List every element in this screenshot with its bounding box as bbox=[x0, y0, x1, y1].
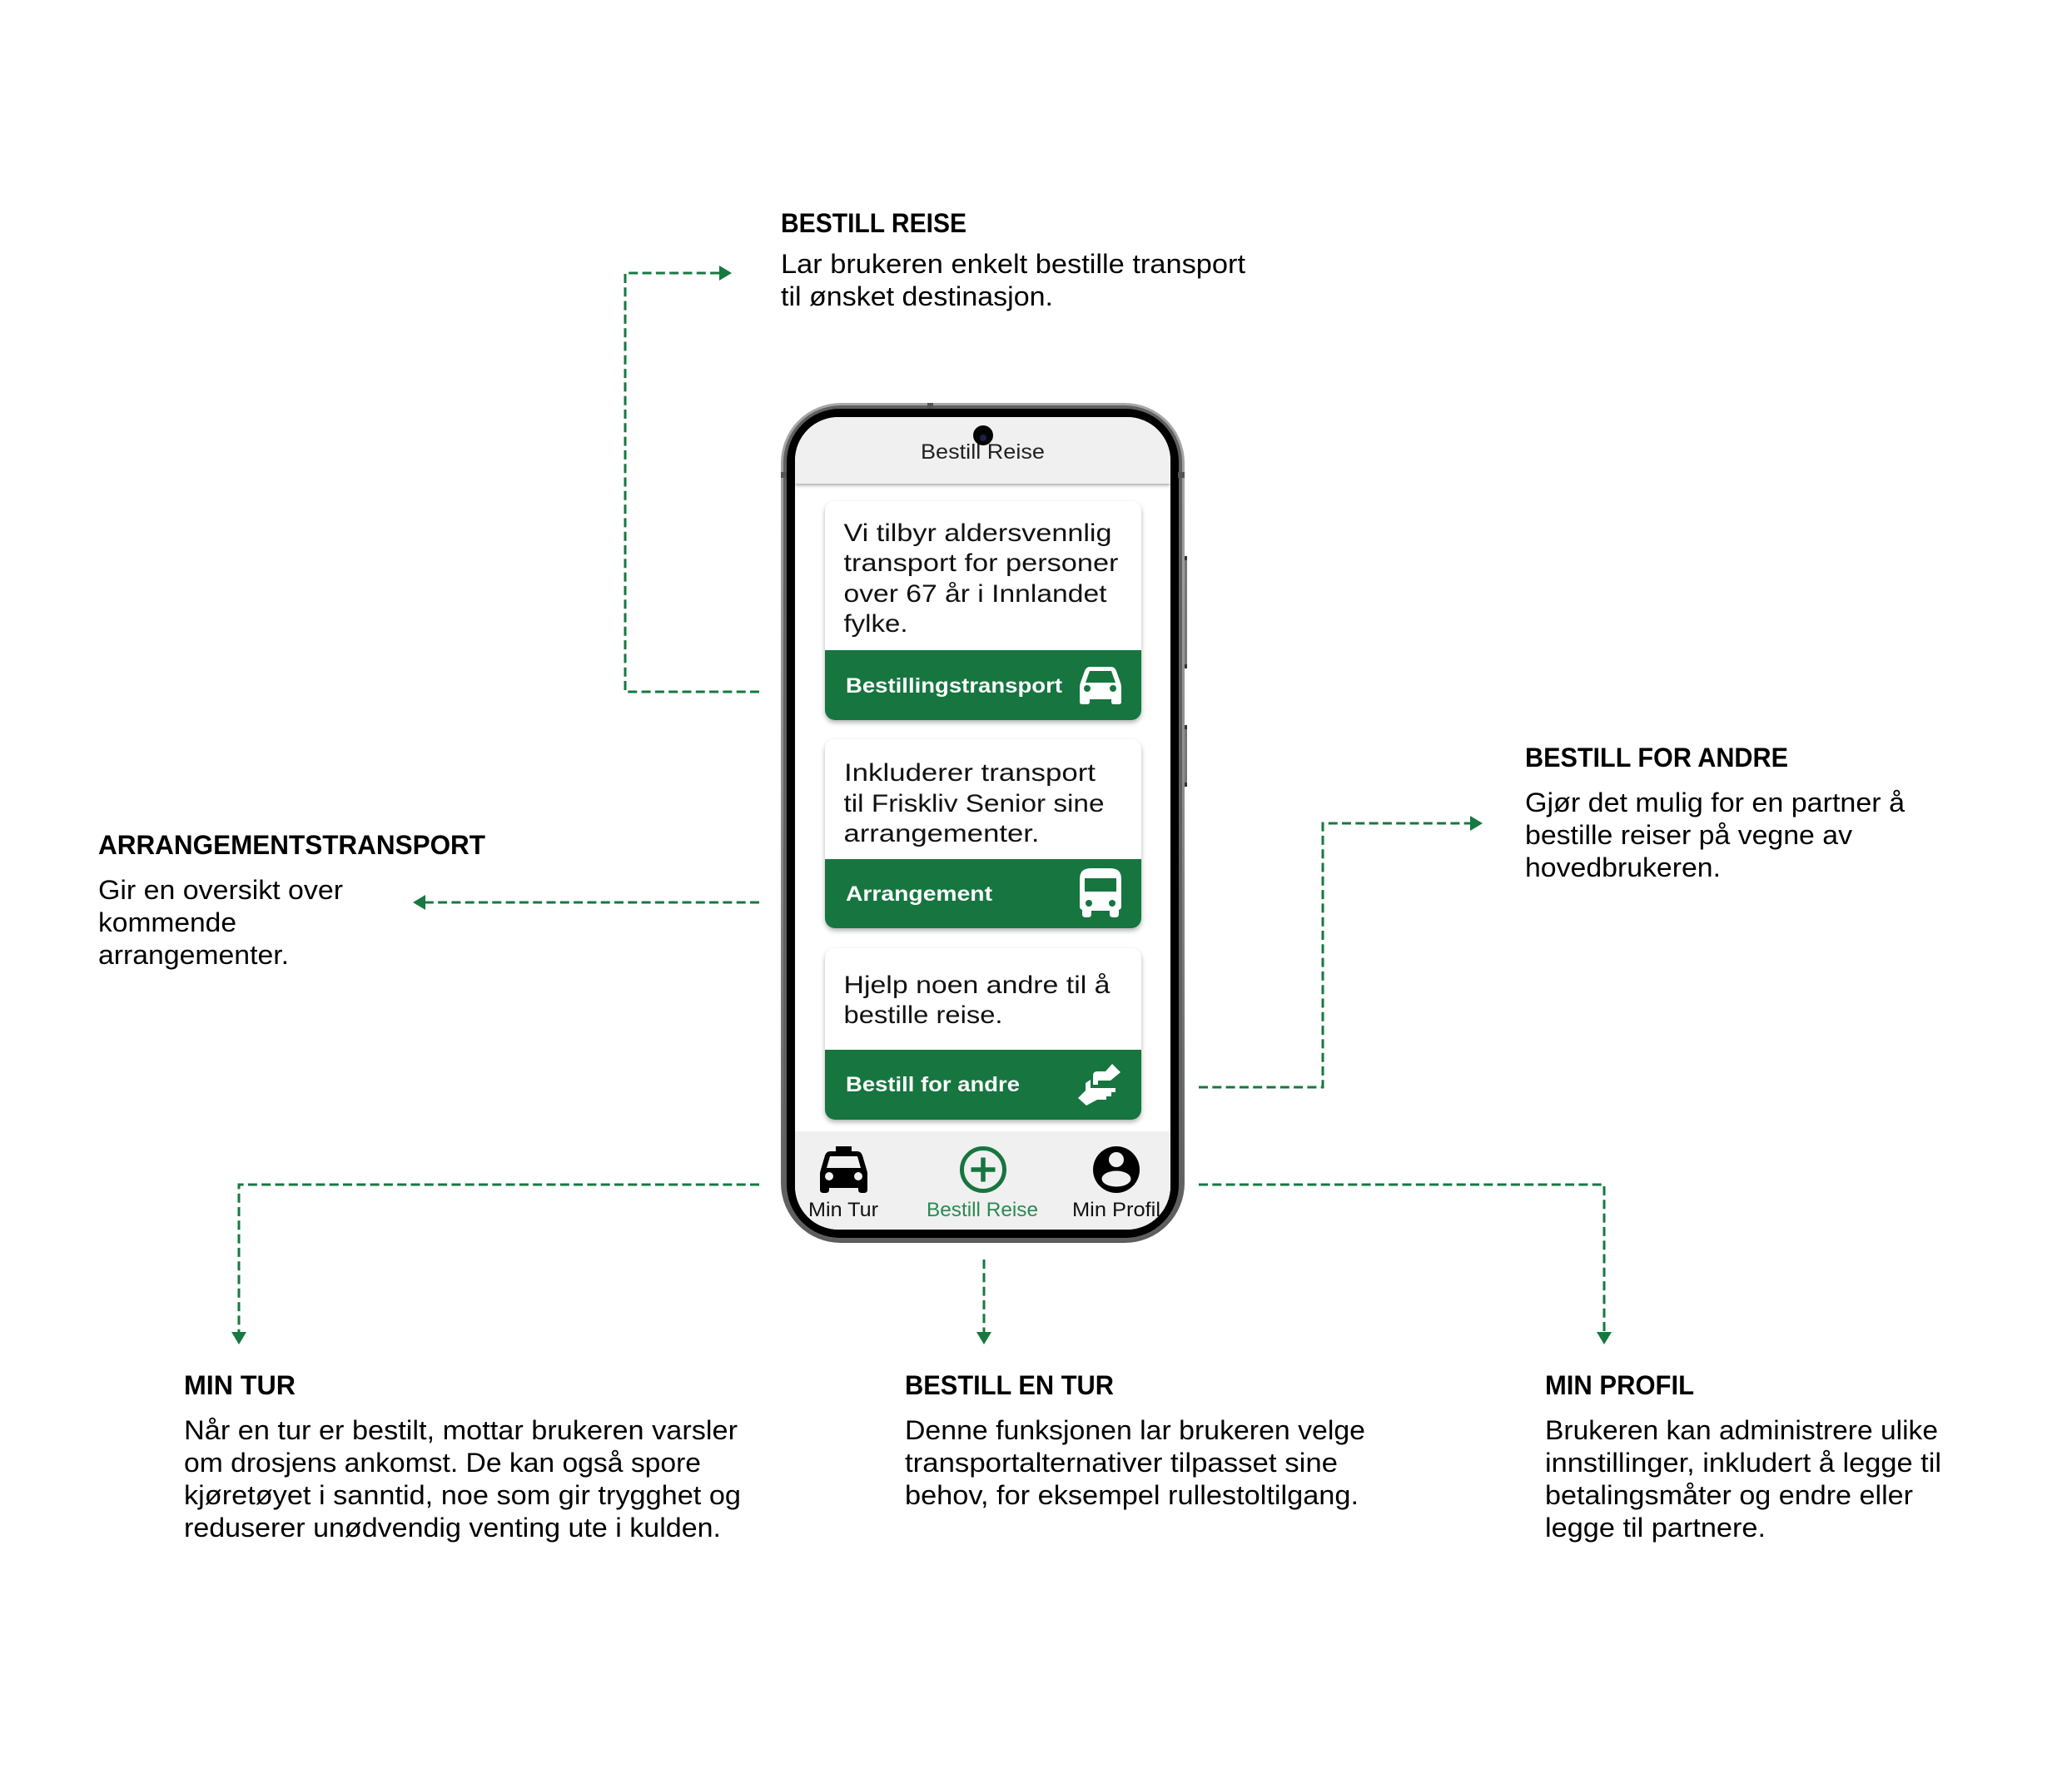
text block: min profil: MIN PROFIL bbox=[1545, 1370, 1694, 1400]
text block: arrangementstransport: Gir en oversikt over bbox=[98, 875, 343, 905]
card: bestill for andre: Hjelp noen andre til å bbox=[844, 971, 1111, 999]
card: arrangement bbox=[825, 739, 1141, 928]
text block: min profil: Brukeren kan administrere ulike bbox=[1545, 1415, 1938, 1445]
card: bestillingstransport bbox=[825, 501, 1141, 720]
card: arrangement: Inkluderer transport bbox=[844, 759, 1096, 787]
text block: bestill en tur: behov, for eksempel rullestoltilgang. bbox=[905, 1480, 1359, 1510]
card: bestillingstransport: over 67 år i Innlandet bbox=[844, 580, 1107, 608]
card: bestill for andre: Bestill for andre bbox=[846, 1073, 1020, 1096]
card: bestill for andre bbox=[825, 948, 1141, 1120]
text block: bestill for andre bbox=[1525, 743, 1905, 882]
text block: bestill for andre: bestille reiser på vegne av bbox=[1525, 820, 1852, 850]
text block: bestill for andre: Gjør det mulig for en partner å bbox=[1525, 788, 1905, 817]
text block: bestill reise: til ønsket destinasjon. bbox=[781, 281, 1053, 311]
card: bestillingstransport: Bestillingstransport bbox=[846, 674, 1063, 698]
text block: min profil: legge til partnere. bbox=[1545, 1513, 1766, 1543]
card: bestill for andre: bestille reise. bbox=[844, 1001, 1002, 1029]
text block: bestill en tur: BESTILL EN TUR bbox=[905, 1370, 1114, 1400]
text block: bestill en tur: Denne funksjonen lar brukeren velge bbox=[905, 1415, 1365, 1445]
card: arrangement: Arrangement bbox=[846, 882, 993, 906]
nav label: min profil: Min Profil bbox=[1072, 1199, 1160, 1221]
phone frame bbox=[781, 403, 1187, 1243]
text block: bestill reise: BESTILL REISE bbox=[781, 208, 966, 238]
text block: bestill for andre: hovedbrukeren. bbox=[1525, 852, 1721, 882]
screen bbox=[795, 417, 1170, 1230]
nav label: bestill reise: Bestill Reise bbox=[927, 1199, 1038, 1221]
text block: min tur: kjøretøyet i sanntid, noe som gir trygghet og bbox=[184, 1480, 741, 1510]
text block: min tur bbox=[184, 1370, 741, 1543]
arrow: to bestill for andre bbox=[1199, 816, 1483, 1087]
arrow: to min profil bbox=[1199, 1185, 1612, 1344]
phone bbox=[781, 403, 1187, 1243]
text block: arrangementstransport: ARRANGEMENTSTRANSPORT bbox=[98, 830, 485, 860]
text block: bestill for andre: BESTILL FOR ANDRE bbox=[1525, 743, 1788, 773]
card: bestillingstransport: Vi tilbyr aldersvennlig bbox=[844, 519, 1112, 547]
card: arrangement: arrangementer. bbox=[844, 820, 1039, 847]
arrow: to bestill reise bbox=[625, 266, 759, 692]
icon: helping hands bbox=[1078, 1064, 1120, 1106]
text block: min profil: innstillinger, inkludert å legge til bbox=[1545, 1448, 1941, 1478]
text block: bestill en tur bbox=[905, 1370, 1365, 1510]
icon: taxi bbox=[820, 1146, 867, 1193]
icon: front camera bbox=[973, 425, 993, 445]
text block: min tur: reduserer unødvendig venting ute i kulden. bbox=[184, 1513, 721, 1543]
bottom navigation bbox=[795, 1131, 1170, 1230]
icon: bus bbox=[1080, 868, 1121, 917]
text block: min profil: betalingsmåter og endre eller bbox=[1545, 1480, 1913, 1510]
card: arrangement: til Friskliv Senior sine bbox=[844, 790, 1104, 817]
text block: arrangementstransport: arrangementer. bbox=[98, 940, 289, 970]
arrow: to min tur bbox=[231, 1185, 759, 1344]
icon: plus circle bbox=[962, 1149, 1004, 1190]
text block: arrangementstransport bbox=[98, 830, 485, 970]
text block: bestill en tur: transportalternativer tilpasset sine bbox=[905, 1448, 1338, 1478]
text block: bestill reise bbox=[781, 208, 1245, 311]
text block: min tur: om drosjens ankomst. De kan også spore bbox=[184, 1448, 701, 1478]
card: bestillingstransport: fylke. bbox=[844, 610, 907, 638]
text block: min profil bbox=[1545, 1370, 1941, 1543]
nav label: min tur: Min Tur bbox=[808, 1199, 878, 1221]
card: bestillingstransport: transport for personer bbox=[844, 549, 1119, 577]
icon: car bbox=[1080, 667, 1121, 704]
text block: min tur: MIN TUR bbox=[184, 1370, 296, 1400]
arrow: to bestill en tur bbox=[976, 1260, 991, 1344]
header bar bbox=[795, 417, 1170, 484]
text block: bestill reise: Lar brukeren enkelt bestille transport bbox=[781, 249, 1245, 279]
header bar: Bestill Reise bbox=[921, 440, 1045, 464]
text block: min tur: Når en tur er bestilt, mottar brukeren varsler bbox=[184, 1415, 738, 1445]
icon: profile bbox=[1093, 1146, 1140, 1193]
arrow: to arrangementstransport bbox=[413, 895, 759, 910]
text block: arrangementstransport: kommende bbox=[98, 907, 236, 937]
